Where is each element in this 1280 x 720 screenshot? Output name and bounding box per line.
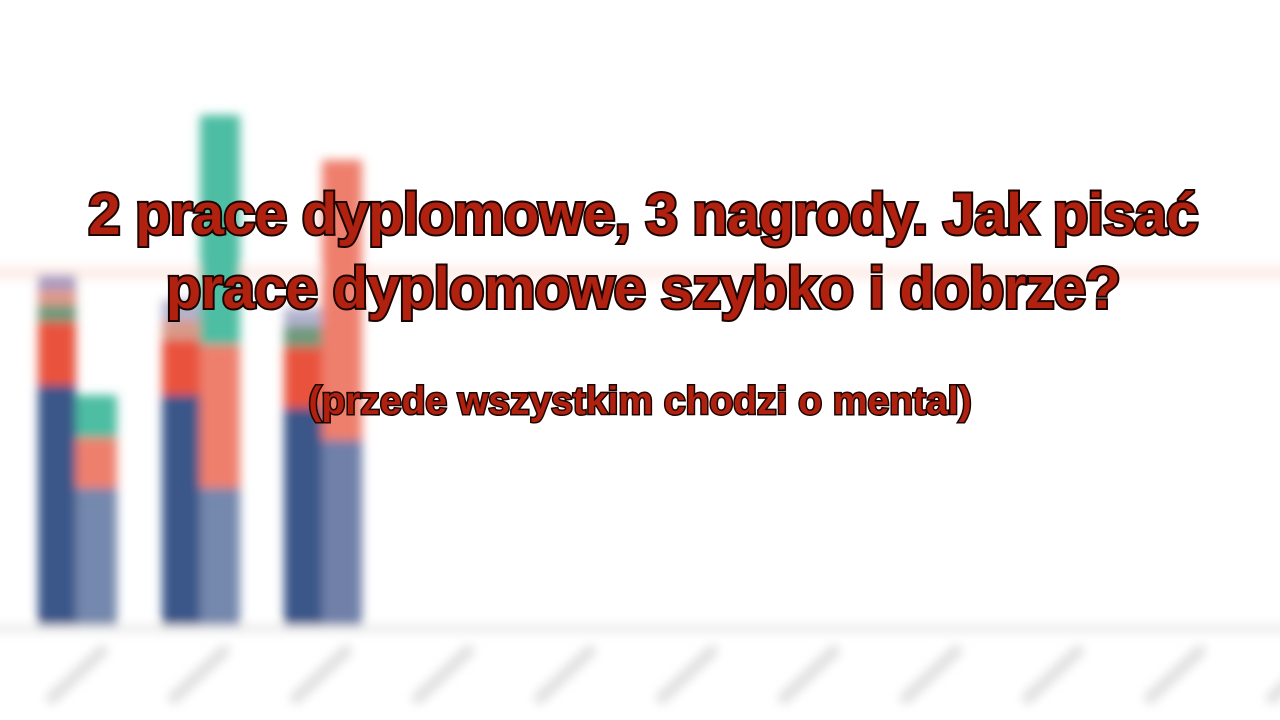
x axis line — [0, 624, 1280, 633]
title — [88, 182, 1199, 322]
title: 2 prace dyplomowe, 3 nagrody. Jak pisać — [88, 182, 1198, 247]
threshold line — [0, 266, 1280, 280]
bar group 2 — [162, 115, 240, 625]
title: prace dyplomowe szybko i dobrze? — [166, 256, 1120, 321]
subtitle: (przede wszystkim chodzi o mental) — [308, 380, 972, 423]
bar group 1 — [38, 275, 117, 625]
rotated axis labels — [52, 651, 1280, 698]
bar group 3 — [284, 160, 362, 625]
